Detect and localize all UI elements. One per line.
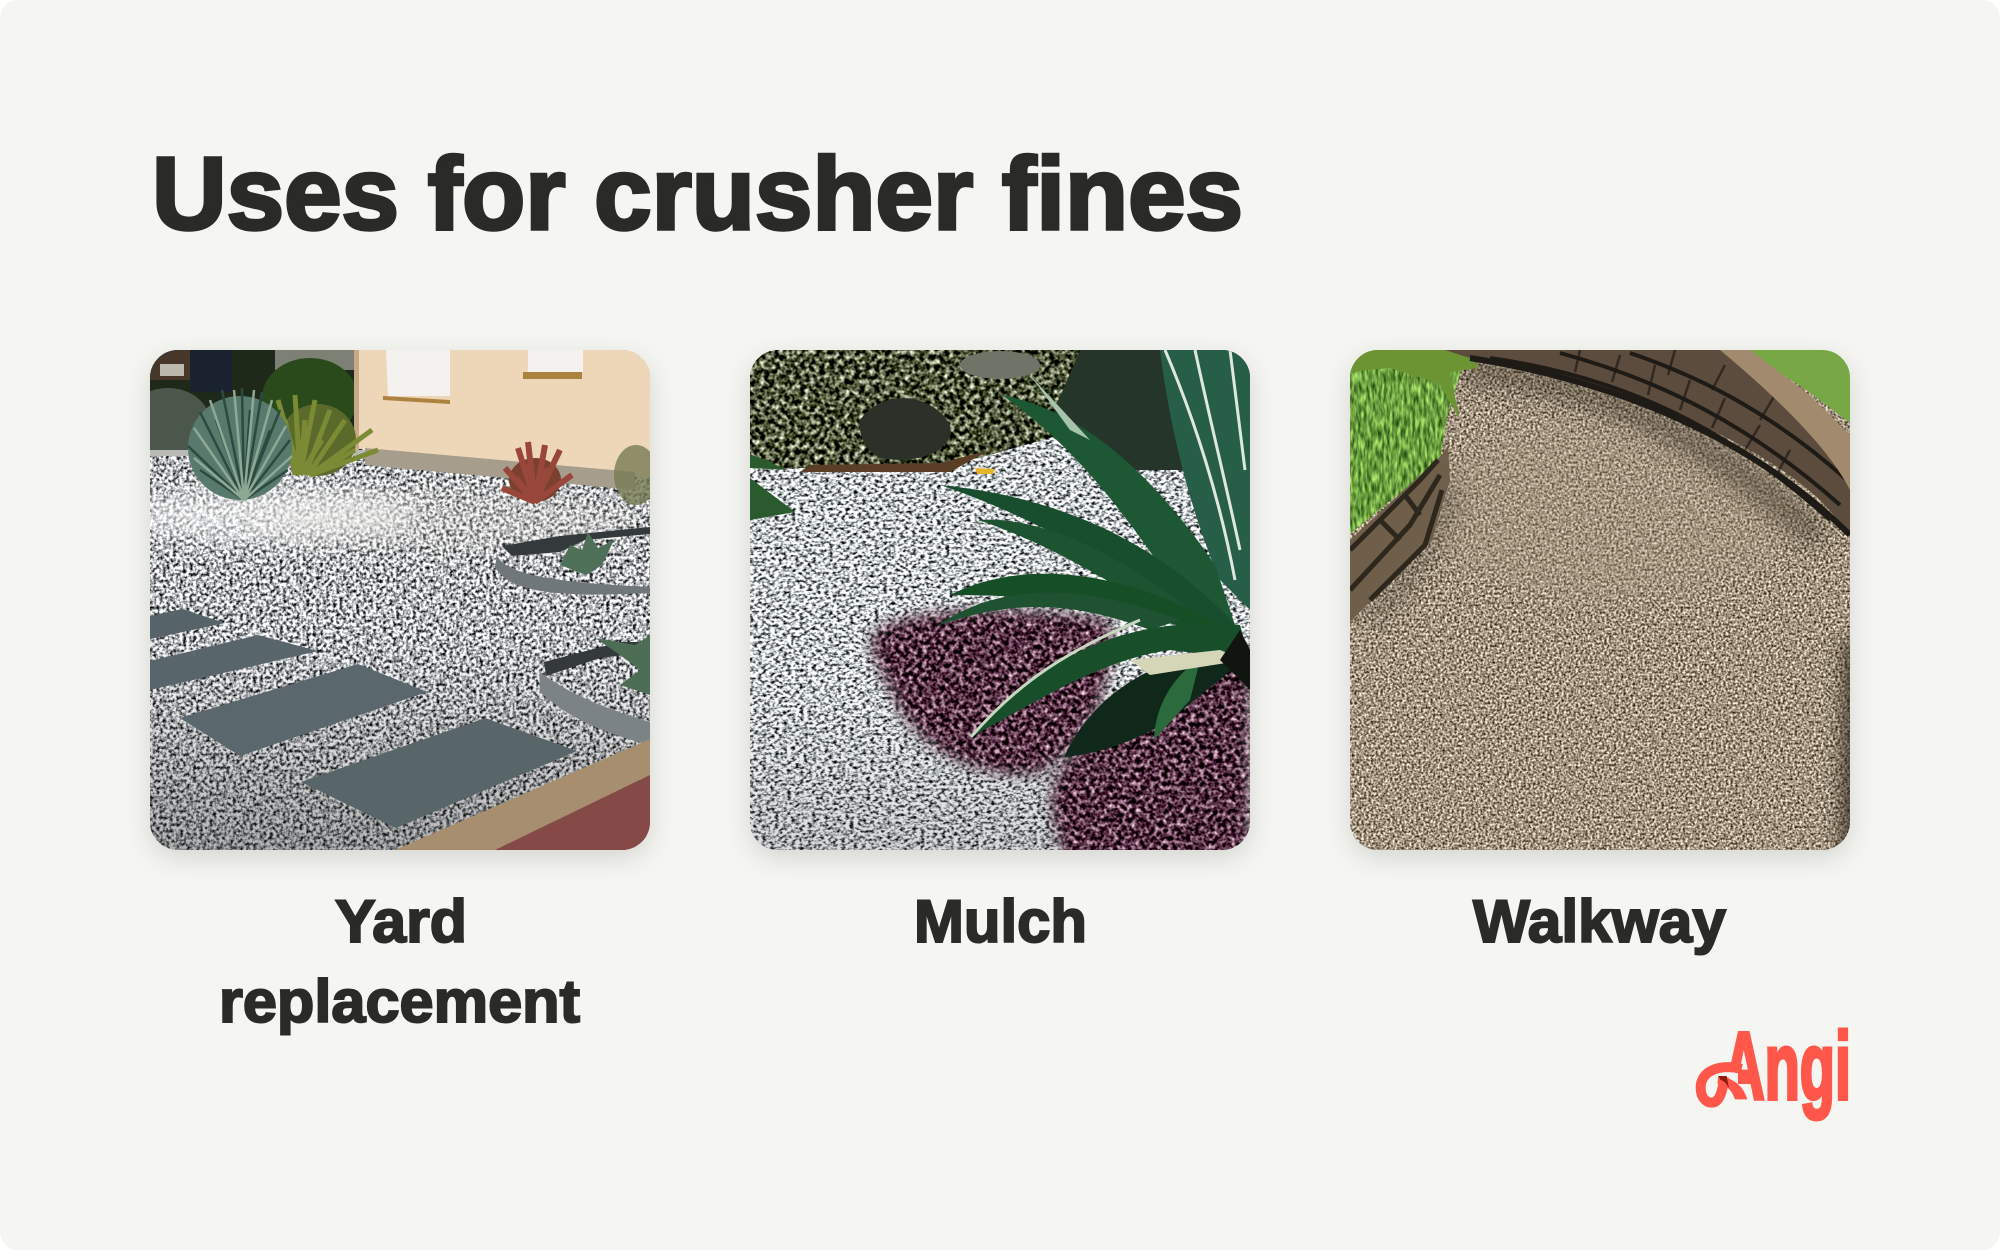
left stone wall: [1350, 445, 1450, 622]
shrubs and rock: [750, 350, 1250, 474]
photo: curved crushed stone walkway: [1350, 350, 1880, 880]
stepping stone 4: [301, 718, 577, 828]
stepping stone 2: [150, 635, 318, 690]
garden edging: lower: [540, 635, 650, 745]
purple plant: front left: [872, 610, 1112, 775]
logo: Angi: [1701, 1013, 1851, 1120]
left shrub: [1350, 350, 1478, 420]
card: walkway: [1350, 350, 1880, 880]
photo: white gravel with agave and purple plant: [750, 350, 1250, 870]
yellow-green plant: [278, 395, 378, 476]
right side shrub: [614, 445, 650, 505]
agave leaves: [937, 350, 1250, 757]
label: yard replacement: replacement: [219, 968, 580, 1035]
small agave left edge: [750, 454, 795, 520]
garden edging: upper: [495, 527, 650, 595]
red pavement: [495, 775, 650, 850]
curved brick wall: [1445, 350, 1850, 535]
stepping stone 3: [180, 664, 427, 756]
purple plant: lower right: [1051, 649, 1250, 870]
agave plant: [188, 388, 292, 500]
red plant: [502, 442, 572, 502]
kerb: [395, 739, 650, 850]
card: yard replacement: [120, 350, 658, 858]
logo: Angi: Angi: [1723, 1013, 1851, 1120]
right lawn: [1744, 350, 1850, 423]
label: yard replacement: [219, 888, 580, 1035]
label: mulch: Mulch: [914, 888, 1087, 955]
title: Uses for crusher fines: [152, 136, 1243, 251]
card: mulch: [750, 350, 1250, 870]
stepping stone 1: [150, 609, 225, 639]
label: yard replacement: Yard: [335, 888, 467, 955]
left lawn: [1350, 350, 1468, 534]
photo: gravel yard with stepping stones: [120, 350, 658, 850]
label: walkway: Walkway: [1473, 888, 1727, 955]
